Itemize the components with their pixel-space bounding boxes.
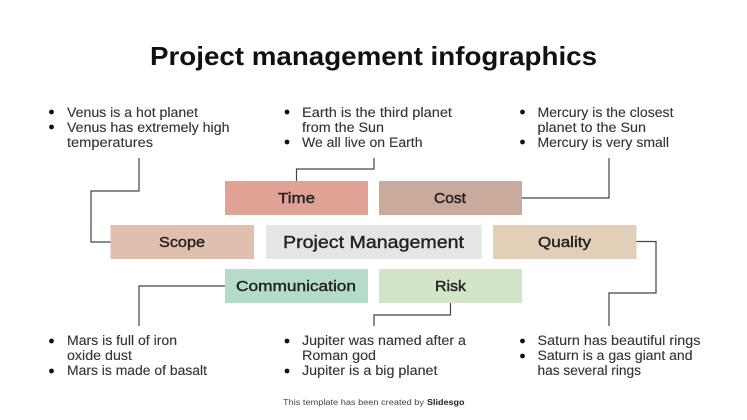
text block: Mars [49, 333, 207, 378]
text block: Jupiter: Jupiter is a big planet [302, 363, 438, 378]
text block: Earth [285, 105, 452, 150]
connector: Cost [522, 158, 609, 198]
text block: Jupiter [285, 333, 467, 378]
text block: Saturn [520, 333, 701, 378]
text block: Jupiter: Jupiter was named after a [302, 333, 467, 348]
connector: Communication [139, 286, 225, 326]
text block: Venus: Venus is a hot planet [67, 105, 198, 120]
text block: Mercury: planet to the Sun [538, 120, 646, 135]
text block: Earth: Earth is the third planet [302, 105, 452, 120]
text block: Venus [49, 105, 229, 150]
text block: Venus: temperatures [67, 135, 153, 150]
box: Project Management [266, 225, 482, 259]
box: Quality: Quality [538, 234, 592, 251]
text block: Mars: Mars is made of basalt [67, 363, 207, 378]
connector: Risk [374, 303, 450, 326]
footer credit: This template has been created by [283, 398, 424, 407]
connector: Quality [609, 242, 656, 326]
box: Scope: Scope [159, 234, 205, 251]
box: Communication: Communication [236, 278, 356, 295]
connector: Time [296, 158, 374, 181]
text block: Saturn: Saturn is a gas giant and [538, 348, 692, 363]
title: Project management infographics [150, 41, 597, 71]
box: Time: Time [278, 190, 315, 207]
text block: Saturn: Saturn has beautiful rings [538, 333, 701, 348]
text block: Venus: Venus has extremely high [67, 120, 230, 135]
text block: Mercury [520, 105, 674, 150]
box: Project Management: Project Management [283, 232, 464, 252]
text block: Mars: oxide dust [67, 348, 132, 363]
text block: Jupiter: Roman god [302, 348, 376, 363]
footer credit: Slidesgo [427, 398, 465, 407]
text block: Mars: Mars is full of iron [67, 333, 177, 348]
connector: Scope [91, 158, 139, 242]
text block: Mercury: Mercury is very small [538, 135, 669, 150]
box: Cost [379, 181, 522, 215]
text block: Saturn: has several rings [538, 363, 641, 378]
text block: Mercury: Mercury is the closest [538, 105, 674, 120]
box: Scope [110, 225, 254, 259]
box: Quality [493, 225, 636, 259]
box: Time [225, 181, 368, 215]
box: Risk [379, 269, 522, 303]
text block: Earth: from the Sun [302, 120, 384, 135]
text block: Earth: We all live on Earth [302, 135, 422, 150]
box: Risk: Risk [435, 278, 467, 295]
box: Cost: Cost [434, 190, 467, 207]
box: Communication [225, 269, 368, 303]
footer credit [283, 398, 465, 407]
